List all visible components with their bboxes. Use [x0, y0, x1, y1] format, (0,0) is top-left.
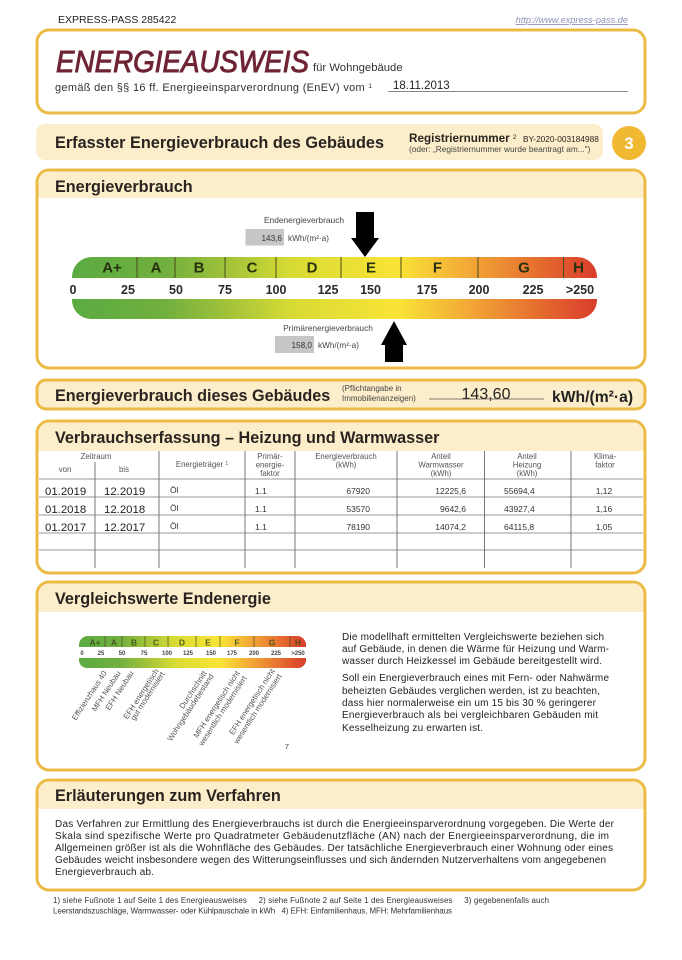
mini energy scale: C	[153, 638, 159, 648]
table header: Primär-	[257, 452, 283, 461]
primary energy value: kWh/(m²·a)	[318, 341, 359, 350]
energy scale with classes: C	[247, 260, 258, 276]
scale numbers: 0	[70, 283, 77, 297]
heading: Erfasster Energieverbrauch des Gebäudes	[55, 134, 384, 152]
panel: comparison values	[37, 582, 645, 770]
explanatory text: Kesselheizung zu erwarten ist.	[342, 723, 483, 734]
table header: Energieverbrauch	[315, 452, 377, 461]
body text: Gebäudes weicht insbesondere wegen des Witterungseinflusses und sich ändernden Nutzerverhaltens vom angegebenen	[55, 855, 606, 866]
legal basis line: 1	[368, 83, 372, 90]
row 2018: 1,16	[596, 504, 613, 514]
row 2018: 01.2018	[45, 504, 86, 516]
row 2017: 12.2017	[104, 522, 145, 534]
scale numbers: 150	[360, 283, 381, 297]
registration number: BY-2020-003184988	[523, 134, 599, 144]
table header: (kWh)	[517, 469, 538, 478]
scale numbers: 225	[523, 283, 543, 297]
table header: von	[59, 465, 71, 474]
mini energy scale: F	[234, 638, 240, 648]
page number badge: 3	[624, 134, 634, 153]
header: pass number: EXPRESS-PASS 285422	[58, 14, 176, 26]
table header: Heizung	[513, 460, 541, 470]
row 2018: 12.2018	[104, 504, 145, 516]
final energy value: 143,6	[262, 234, 282, 243]
row 2019: Öl	[170, 485, 179, 495]
row 2017: 14074,2	[435, 522, 466, 532]
mini energy scale: 200	[249, 651, 260, 657]
explanatory text: Soll ein Energieverbrauch eines mit Fern- oder Nahwärme	[342, 673, 609, 684]
explanatory text	[341, 632, 609, 734]
rotated building labels: wesentlich modernisiert	[231, 671, 284, 746]
unit: kWh/(m²·a)	[552, 389, 633, 406]
row 2017: 01.2017	[45, 522, 86, 534]
subtitle: für Wohngebäude	[313, 62, 403, 74]
table header: Energieträger	[176, 460, 223, 469]
mini energy scale: 175	[227, 651, 238, 657]
mini energy scale: 225	[271, 651, 282, 657]
mini energy scale: E	[205, 638, 211, 648]
final energy label: Endenergieverbrauch	[264, 215, 344, 225]
table header: Klima-	[594, 452, 616, 461]
scale numbers: 100	[266, 283, 286, 297]
energy scale with classes: F	[433, 260, 442, 276]
mini energy scale: 100	[162, 651, 173, 657]
table header: energie-	[256, 460, 285, 470]
arrow: primary energy marker	[381, 321, 407, 362]
table header: faktor	[595, 460, 615, 470]
mini energy scale: 50	[119, 651, 126, 657]
row 2018: Öl	[170, 503, 179, 513]
energy scale with classes	[72, 257, 597, 278]
energy scale with classes: E	[366, 260, 376, 276]
heading: Energieverbrauch	[55, 178, 193, 196]
final energy value	[246, 229, 329, 246]
row 2017: Öl	[170, 521, 179, 531]
mini energy scale: H	[295, 638, 301, 648]
table header: (kWh)	[336, 460, 357, 470]
table header: faktor	[260, 469, 280, 478]
table grid	[95, 451, 571, 568]
energy scale with classes: G	[518, 260, 530, 276]
legal basis line: gemäß den §§ 16 ff. Energieeinsparverordnung (EnEV) vom	[55, 82, 365, 94]
mini energy scale: 150	[206, 651, 217, 657]
rotated building labels: wesentlich modernisiert	[196, 673, 249, 748]
row 2019: 01.2019	[45, 486, 86, 498]
body text: Skala sind spezifische Werte pro Quadratmeter Gebäudenutzfläche (AN) nach der Energieeinsparverordnung, die im	[55, 831, 609, 842]
arrow: final energy marker	[351, 212, 379, 257]
registration note: (oder: „Registriernummer wurde beantragt am...")	[409, 144, 591, 154]
mini energy scale: 0	[80, 651, 84, 657]
row 2019	[45, 485, 613, 498]
scale numbers: 200	[469, 283, 489, 297]
rotated building labels: Durchschnitt	[178, 668, 209, 710]
table header: Anteil	[517, 452, 537, 461]
scale numbers: 125	[318, 283, 338, 297]
page number badge	[612, 126, 646, 160]
explanatory text: Energieverbrauch als bei vergleichbaren Gebäuden mit	[342, 710, 598, 721]
mini energy scale: B	[131, 638, 137, 648]
rotated building labels: Wohngebäudebestand	[165, 672, 216, 743]
rotated building labels: Effizienzhaus 40	[70, 669, 109, 722]
mini energy scale: 75	[141, 651, 148, 657]
mandatory note: Immobilienanzeigen)	[342, 394, 416, 403]
heading: Energieverbrauch dieses Gebäudes	[55, 387, 330, 405]
header: website link: http://www.express-pass.de	[516, 15, 628, 25]
row 2018: 43927,4	[504, 504, 535, 514]
mini energy scale: D	[179, 638, 185, 648]
issue date: 18.11.2013	[393, 80, 450, 92]
final energy value: kWh/(m²·a)	[288, 234, 329, 243]
body text	[55, 819, 615, 878]
scale numbers: 75	[218, 283, 232, 297]
row 2017: 78190	[346, 522, 370, 532]
mini energy scale: 25	[98, 651, 105, 657]
mini energy scale: 125	[183, 651, 194, 657]
explanatory text: dass hier normalerweise ein um 15 bis 30 % geringerer	[342, 698, 597, 709]
scale numbers: >250	[566, 283, 594, 297]
scale numbers: 50	[169, 283, 183, 297]
energy scale with classes: A	[151, 260, 162, 276]
row 2019: 1.1	[255, 486, 267, 496]
row 2017: 1.1	[255, 522, 267, 532]
registration number: Registriernummer	[409, 132, 510, 145]
table header	[59, 452, 616, 478]
chart note number: 7	[285, 742, 289, 751]
mandatory note: (Pflichtangabe in	[342, 384, 402, 393]
rotated building labels: EFH energetisch nicht	[227, 666, 277, 736]
table header: Zeitraum	[81, 452, 111, 461]
row 2018: 1.1	[255, 504, 267, 514]
footnotes: Leerstandszuschläge, Warmwasser- oder Kühlpauschale in kWh 4) EFH: Einfamilienhaus, MFH: Mehrfamilienhaus	[53, 906, 452, 916]
rotated building labels: MFH energetisch nicht	[192, 668, 242, 740]
footnotes: 1) siehe Fußnote 1 auf Seite 1 des Energieausweises 2) siehe Fußnote 2 auf Seite 1 des Energieausweises 3) gegebenenfalls auch	[53, 896, 549, 905]
explanatory text: wasser durch Heizkessel im Gebäude bereitgestellt wird.	[341, 656, 602, 667]
row 2018: 53570	[346, 504, 370, 514]
row 2019: 12225,6	[435, 486, 466, 496]
body text: Allgemeinen größer ist als die Wohnfläche des Gebäudes. Der tatsächliche Energieverbrauch einer Wohnung oder eines	[55, 843, 613, 854]
scale numbers: 175	[417, 283, 437, 297]
row 2018: 9642,6	[440, 504, 466, 514]
explanatory text: Die modellhaft ermittelten Vergleichswerte beziehen sich	[342, 632, 604, 643]
primary energy value: 158,0	[292, 341, 312, 350]
rotated building labels	[70, 666, 284, 748]
heading: Verbrauchserfassung – Heizung und Warmwasser	[55, 429, 440, 447]
table header: 1	[225, 461, 228, 467]
panel: explanation of procedure	[37, 780, 645, 890]
mini energy scale: A	[111, 638, 117, 648]
row 2019: 12.2019	[104, 486, 145, 498]
primary energy value	[275, 336, 359, 353]
energy scale with classes: B	[194, 260, 205, 276]
row 2017: 64115,8	[504, 522, 534, 532]
lower gradient bar	[72, 299, 597, 319]
rotated building labels: EFH energetisch	[121, 667, 161, 721]
registration number: 2	[513, 134, 517, 141]
row 2019: 55694,4	[504, 486, 535, 496]
rotated building labels: MFH Neubau	[90, 669, 123, 713]
panel: registration band	[36, 124, 603, 160]
table header: bis	[119, 465, 129, 474]
table header: Warmwasser	[418, 460, 464, 470]
panel: consumption table	[37, 421, 645, 573]
scale numbers	[70, 283, 594, 297]
explanatory text: auf Gebäude, in denen die Wärme für Heizung und Warm-	[342, 644, 609, 655]
scale numbers: 25	[121, 283, 135, 297]
panel: building consumption	[37, 380, 645, 409]
mini energy scale: >250	[291, 651, 305, 657]
heading: Vergleichswerte Endenergie	[55, 590, 271, 608]
table header: Anteil	[431, 452, 451, 461]
row 2017: 1,05	[596, 522, 613, 532]
mini energy scale: A+	[89, 638, 101, 648]
energy scale with classes: A+	[102, 260, 122, 276]
row 2019: 67920	[346, 486, 370, 496]
body text: Energieverbrauch ab.	[55, 867, 154, 878]
body text: Das Verfahren zur Ermittlung des Energieverbrauchs ist durch die Energieeinsparverordnung vorgegeben. Die Werte der	[55, 819, 615, 830]
table header: (kWh)	[431, 469, 452, 478]
rotated building labels: EFH Neubau	[104, 669, 136, 712]
mini energy scale: G	[269, 638, 276, 648]
explanatory text: beheizten Gebäudes verglichen werden, ist zu beachten,	[342, 686, 600, 697]
value: 143,60	[462, 386, 511, 403]
row 2019: 1,12	[596, 486, 613, 496]
title: ENERGIEAUSWEIS	[56, 45, 310, 79]
mini energy scale	[79, 636, 306, 668]
primary energy label: Primärenergieverbrauch	[283, 323, 373, 333]
row 2017	[45, 521, 613, 534]
panel: title	[37, 30, 645, 113]
footnotes	[53, 896, 549, 916]
energy scale with classes: D	[307, 260, 318, 276]
energy scale with classes: H	[573, 260, 584, 276]
panel: energy consumption	[37, 170, 645, 368]
rotated building labels: gut modernisiert	[129, 669, 167, 722]
row 2018	[45, 503, 613, 516]
heading: Erläuterungen zum Verfahren	[55, 787, 281, 805]
